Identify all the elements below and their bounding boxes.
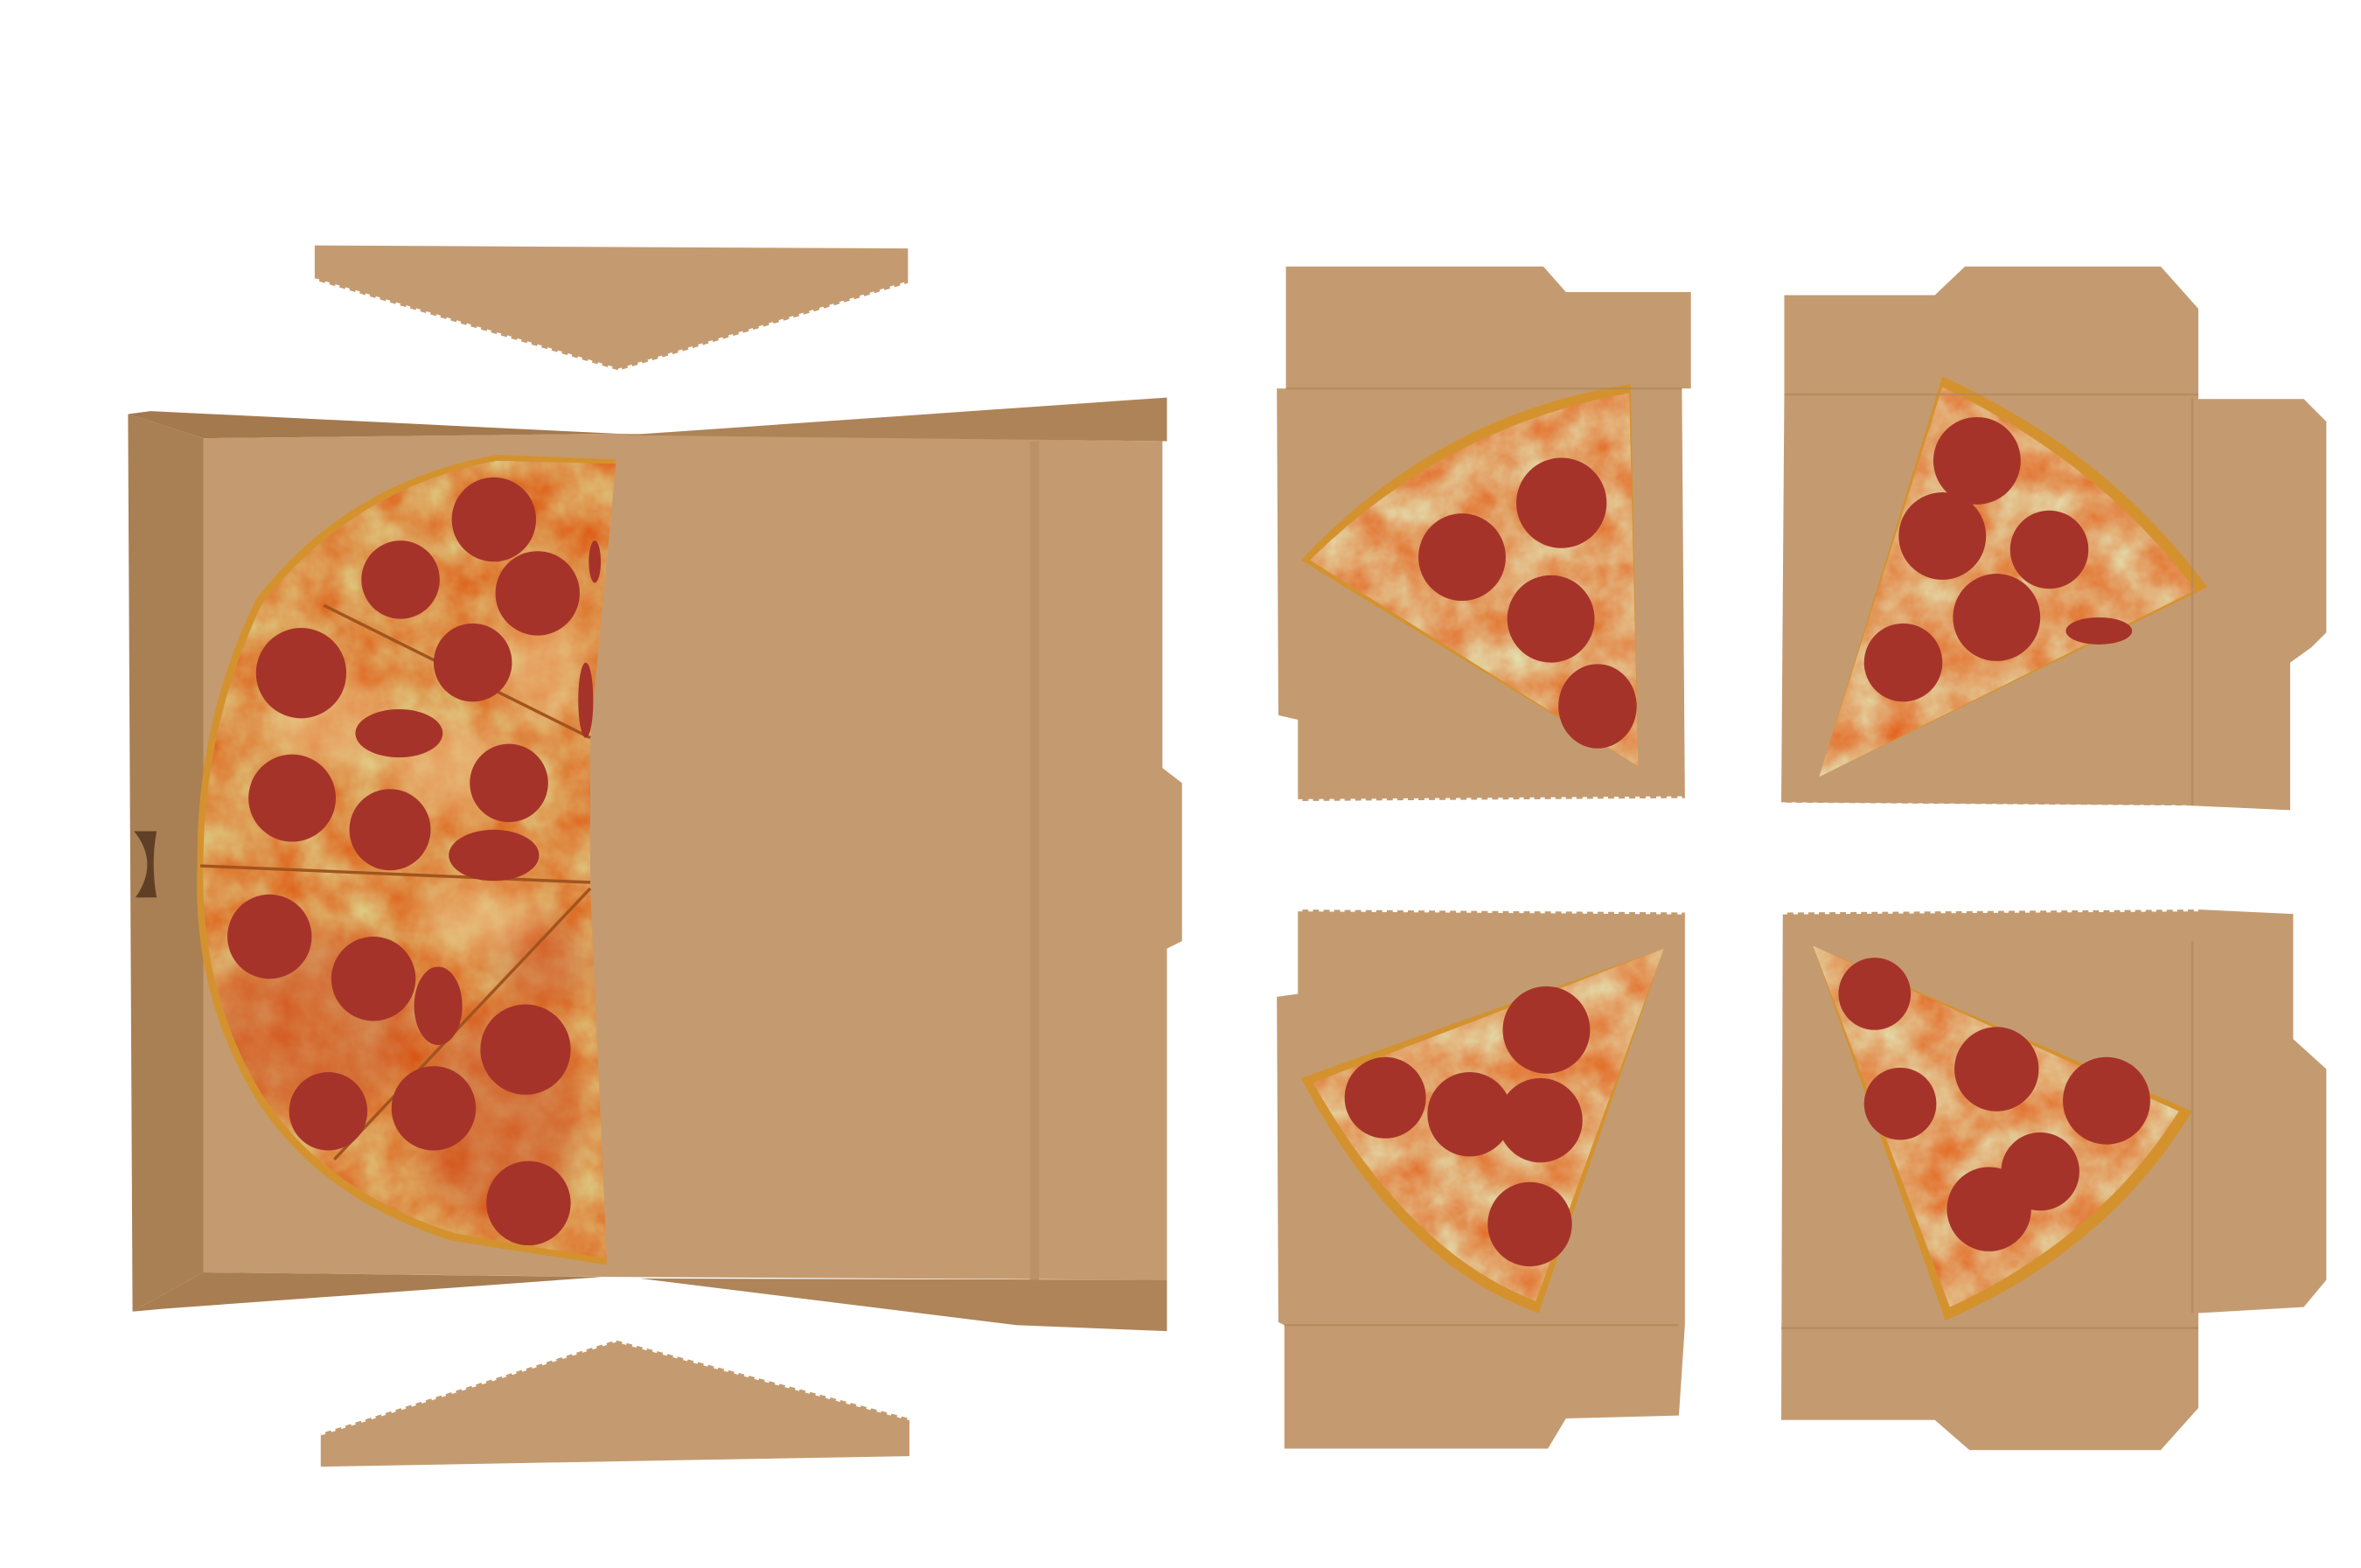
cardboard bbox=[1277, 909, 1685, 1448]
lid fold band bbox=[1030, 442, 1039, 1280]
small box bottom left bbox=[1277, 909, 1685, 1448]
slice bbox=[1813, 945, 2192, 1321]
slice bbox=[1301, 949, 1664, 1313]
cardboard bbox=[1781, 909, 2326, 1450]
half pizza bbox=[197, 455, 616, 1265]
thumb notch bbox=[134, 831, 157, 897]
cheese bbox=[203, 461, 616, 1258]
small box top right bbox=[1781, 267, 2326, 810]
sauce patches bbox=[211, 603, 588, 1220]
illustration: pizza box cut into four smaller boxes bbox=[128, 245, 2326, 1467]
slice bbox=[1301, 384, 1638, 766]
top wall right bbox=[625, 398, 1167, 442]
large open pizza box bbox=[128, 398, 1182, 1331]
cardboard bbox=[1781, 267, 2326, 810]
slice bbox=[1819, 376, 2207, 777]
serrated cut edges bbox=[315, 280, 2198, 1433]
top wall left bbox=[128, 411, 617, 438]
top triangular flap bbox=[315, 246, 908, 371]
pepperoni bbox=[227, 477, 601, 1245]
bottom triangular flap bbox=[321, 1340, 909, 1467]
fold lines bbox=[1285, 388, 2198, 1328]
cardboard bbox=[1277, 267, 1691, 801]
small box top left bbox=[1277, 267, 1691, 801]
bottom wall left bbox=[133, 1272, 602, 1312]
bottom wall right bbox=[640, 1279, 1167, 1331]
box floor and lid bbox=[203, 434, 1182, 1280]
left wall bbox=[128, 415, 203, 1312]
crust bbox=[197, 455, 616, 1265]
small box bottom right bbox=[1781, 909, 2326, 1450]
slice cuts bbox=[200, 605, 590, 1160]
